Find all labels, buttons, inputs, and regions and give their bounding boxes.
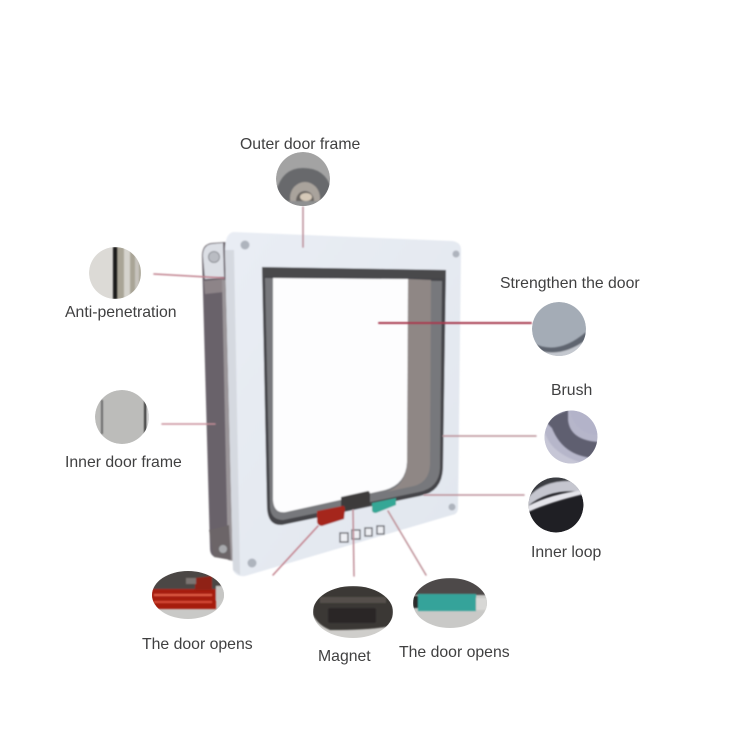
teal lock tab (372, 498, 396, 513)
door product illustration (202, 232, 461, 576)
top rim bar (263, 268, 445, 278)
line: anti-penetration (154, 274, 224, 278)
detail: inner door frame (95, 390, 151, 444)
mode icons (340, 526, 384, 542)
door tunnel inner wall (386, 279, 431, 492)
label: brush: Brush (551, 382, 592, 399)
magnet catch (341, 491, 370, 511)
detail: magnet (313, 586, 393, 638)
line: strengthen the door (379, 322, 531, 324)
line: brush (443, 435, 536, 437)
labels (65, 136, 640, 665)
label: inner door frame: Inner door frame (65, 454, 182, 471)
screw: bottom left (218, 544, 228, 554)
detail: brush (544, 410, 598, 464)
red lock tab (317, 506, 345, 526)
label: outer door frame: Outer door frame (240, 136, 360, 153)
line: red tab (273, 526, 318, 575)
outer door frame plate (225, 232, 461, 576)
label: magnet: Magnet (318, 648, 371, 665)
detail: anti-penetration (89, 247, 141, 299)
label: the door opens, right: The door opens (399, 644, 510, 661)
line: inner loop (424, 494, 524, 496)
line: outer door frame (302, 207, 304, 247)
detail: outer door frame (276, 152, 330, 206)
detail: teal door latch (413, 578, 487, 628)
label: inner loop: Inner loop (531, 544, 601, 561)
label: the door opens, left: The door opens (142, 636, 253, 653)
door window rim (262, 267, 446, 525)
detail: red door latch (150, 570, 226, 620)
line: teal tab (388, 511, 426, 575)
screw: top left (208, 252, 220, 262)
detail: inner loop (528, 477, 584, 532)
infographic: cat door parts diagram (65, 138, 640, 664)
detail: strengthen the door (532, 302, 586, 360)
transparent flap (273, 278, 408, 512)
label: strengthen the door: Strengthen the door (500, 275, 640, 292)
leader lines (154, 207, 536, 576)
label: anti-penetration: Anti-penetration (65, 304, 177, 321)
inner door frame (rear) (202, 242, 236, 560)
line: inner door frame (162, 423, 215, 425)
line: magnet (353, 510, 354, 576)
plate screws (240, 240, 460, 568)
